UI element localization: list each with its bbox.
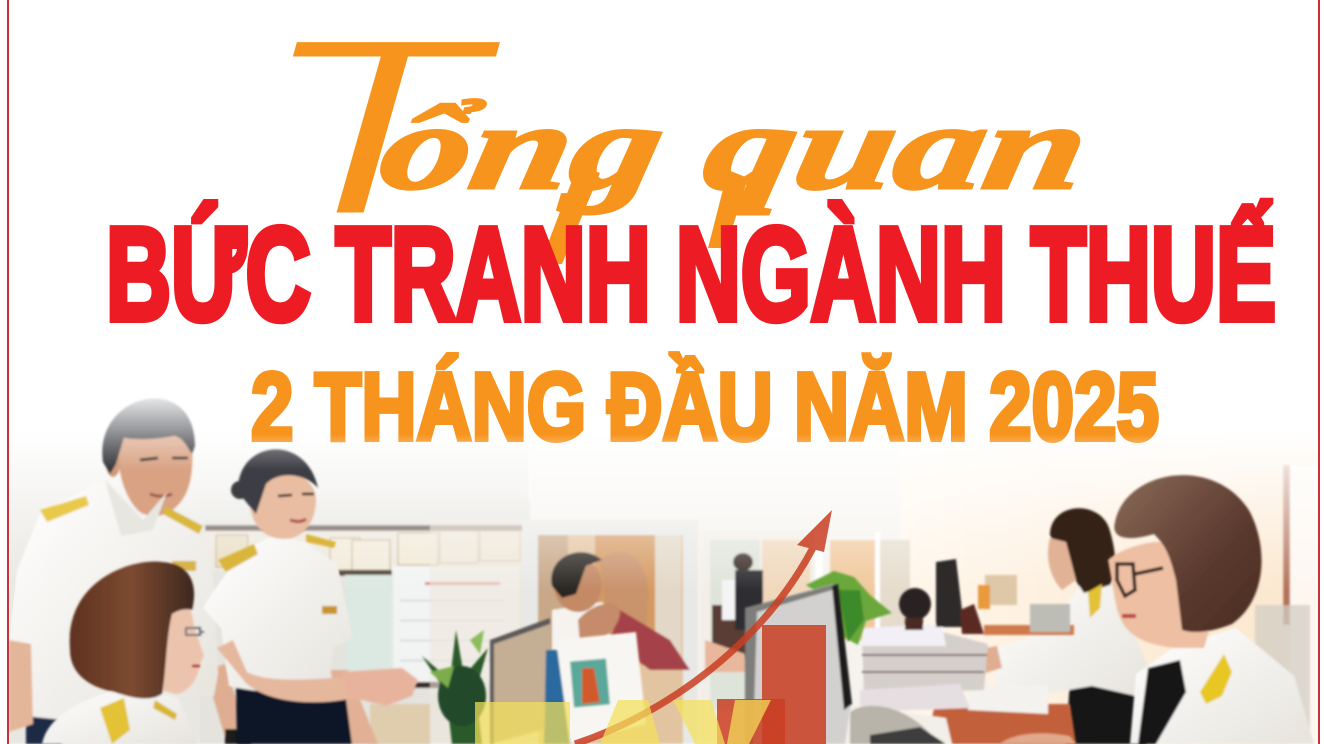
left monitor and calendar — [490, 618, 646, 744]
second monitor — [936, 559, 964, 627]
left border line — [7, 0, 9, 744]
title: script line — [255, 0, 1098, 269]
right border line — [1318, 0, 1320, 744]
q descender swash — [708, 170, 748, 248]
framed certificates wall — [205, 525, 530, 576]
desk globe — [899, 588, 931, 620]
potted plant — [370, 630, 488, 744]
service window frame — [430, 520, 910, 744]
collar — [105, 480, 167, 536]
standing woman — [203, 449, 418, 744]
glasses — [1117, 564, 1163, 596]
seated woman — [42, 562, 204, 744]
green leaves — [806, 571, 892, 645]
notice board — [345, 566, 520, 688]
front monitor — [745, 584, 852, 744]
head — [118, 434, 194, 517]
rising arrow — [575, 510, 832, 744]
photo collage: tax office staff — [9, 398, 1318, 744]
epaulettes — [40, 496, 89, 522]
man behind the counter — [550, 550, 690, 672]
red column chart — [717, 625, 826, 744]
right desk, papers, trays and equipment — [844, 559, 1076, 744]
office background — [9, 455, 1318, 744]
right back woman — [975, 508, 1154, 744]
g descender swash — [540, 165, 600, 264]
standing man — [9, 398, 251, 744]
yellow overlay shapes — [475, 700, 771, 744]
person behind the right window — [705, 553, 763, 672]
front woman — [1000, 475, 1314, 744]
script lowercase words: ổng quan — [371, 79, 1098, 215]
